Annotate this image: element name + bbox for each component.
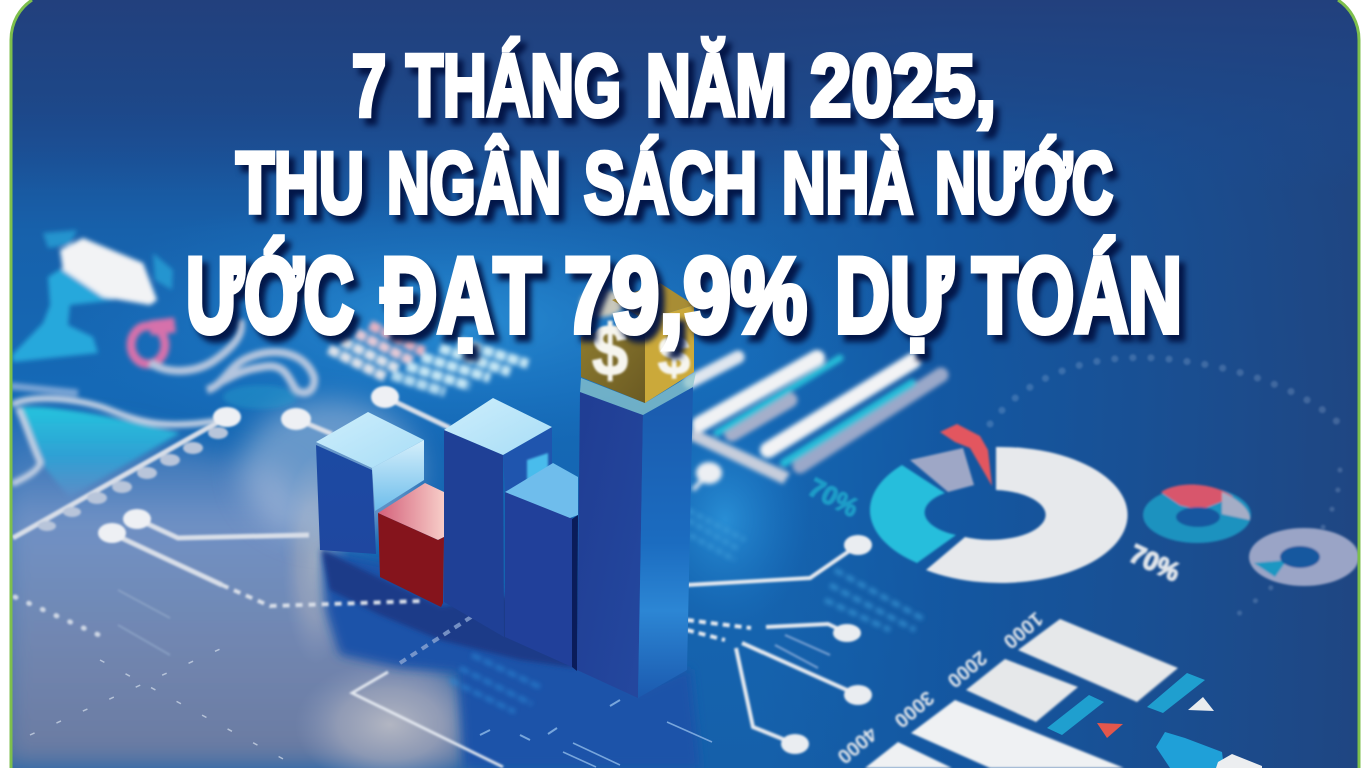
title line 1: 7 (352, 38, 386, 134)
title line 3: ƯỚC (186, 235, 354, 355)
chart: small donut (1249, 528, 1359, 586)
chart: medium donut (1143, 485, 1251, 543)
donut segment: white (926, 447, 1128, 583)
teal mountain chart (10, 386, 222, 497)
blue map shape (1156, 732, 1224, 768)
title (186, 38, 1182, 355)
faint blue text rows on floor (450, 655, 542, 712)
axis labels: 2000 (943, 646, 991, 692)
axis labels (833, 607, 1047, 768)
faint dotted arcs (990, 358, 1345, 620)
illustration: blurred bars top right (690, 357, 941, 490)
title line 2: NƯỚC (935, 136, 1113, 232)
donut segment: red spike (940, 424, 992, 486)
white circuit lines left (13, 386, 450, 655)
teal markers (1047, 673, 1205, 735)
floor shadow of columns (322, 550, 700, 768)
icon: pink ring (131, 325, 175, 364)
title line 1: THÁNG (406, 38, 621, 134)
red block (378, 483, 444, 607)
title line 2 (236, 136, 1113, 232)
title line 3: 79,9% (564, 235, 807, 355)
table cells (865, 619, 1178, 768)
axis labels: 4000 (833, 722, 881, 768)
donut segment: grey (910, 448, 974, 492)
curly white lines (150, 320, 314, 393)
chart: large donut (870, 424, 1128, 583)
faint labels and data rows (688, 510, 925, 630)
column 4 with gold cube (577, 283, 696, 698)
illustration: blurred left dashboard elements (10, 230, 528, 497)
icon: dollar cube: $ (592, 311, 628, 391)
label: 70% teal: 70% (804, 472, 864, 523)
triangle markers (1188, 697, 1214, 711)
title line 1: NĂM (646, 38, 787, 134)
table of blurred cells (329, 325, 528, 392)
icon: teal pedestal with white car (12, 230, 173, 362)
chart: isometric bar table bottom right (833, 607, 1262, 768)
title line 2: NGÂN (387, 136, 561, 232)
title line 2: SÁCH (584, 136, 757, 232)
title line 3: TOÁN (972, 235, 1182, 355)
title line 2: NHÀ (782, 136, 913, 232)
title line 3: DỰ (835, 235, 953, 355)
title line 1 (352, 38, 996, 134)
axis labels: 1000 (999, 607, 1047, 653)
title line 2: THU (236, 136, 364, 232)
dashed floor line (399, 616, 472, 664)
donut segment: teal (870, 465, 956, 563)
title line 1: 2025, (810, 38, 996, 134)
axis labels: 3000 (890, 686, 938, 732)
floor frame (352, 672, 503, 767)
icon: dollar cube: $ (658, 326, 690, 386)
column 2 (444, 398, 552, 637)
title line 3: ĐẠT (381, 235, 541, 355)
illustration: right circuit lines (687, 535, 872, 754)
label: 70%: 70% (1125, 538, 1185, 587)
icon: dollar cube (580, 283, 694, 403)
chart: 3D columns (316, 283, 696, 698)
column 1 (316, 412, 424, 554)
column 3 (505, 463, 578, 671)
title line 3 (186, 235, 1182, 355)
